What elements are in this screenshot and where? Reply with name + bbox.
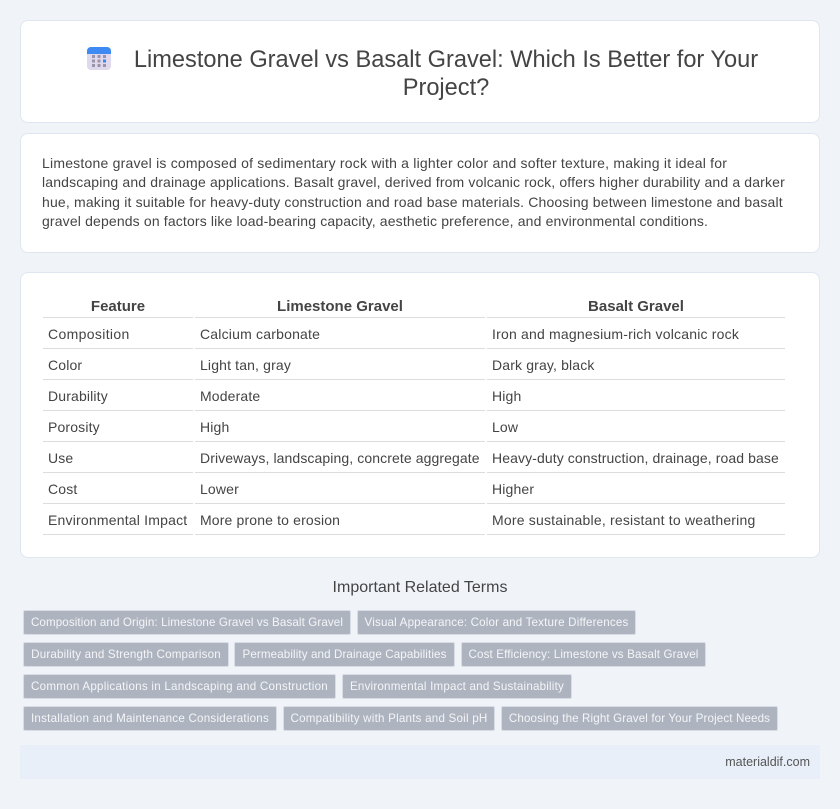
row: porosity xyxy=(48,419,518,435)
text: introduction paragraph: Limestone gravel is composed of sedimentary rock with a lighter color and softer texture, making it ideal for xyxy=(42,154,727,170)
row: use: Driveways, landscaping, concrete aggregate xyxy=(200,450,480,466)
table header: Limestone Gravel xyxy=(277,298,403,315)
tag: Durability and Strength Comparison xyxy=(31,648,221,661)
panel: comparison table xyxy=(20,272,820,558)
footer text: materialdif.com xyxy=(725,755,810,769)
tag xyxy=(357,610,636,635)
row: composition: Iron and magnesium-rich volcanic rock xyxy=(492,326,739,342)
text: introduction paragraph: gravel depends on factors like load-bearing capacity, aesthetic preference, and environmental conditions. xyxy=(42,213,708,229)
footer xyxy=(20,745,820,779)
row: durability: High xyxy=(492,388,521,404)
title: Limestone Gravel vs Basalt Gravel: Which Is Better for Your Project? xyxy=(134,47,758,101)
row: cost: Cost xyxy=(48,481,77,497)
row: environmental impact xyxy=(48,512,755,528)
panel: introduction xyxy=(20,133,820,253)
tag xyxy=(23,706,277,731)
tag: Permeability and Drainage Capabilities xyxy=(243,648,446,661)
panel: header xyxy=(20,20,820,123)
row: color: Light tan, gray xyxy=(200,357,291,373)
row: environmental impact: Environmental Impact xyxy=(48,512,187,528)
tag: Environmental Impact and Sustainability xyxy=(350,680,564,693)
row: color: Color xyxy=(48,357,82,373)
table header: Feature xyxy=(91,298,145,315)
row: color: Dark gray, black xyxy=(492,357,595,373)
row: environmental impact: More prone to erosion xyxy=(200,512,340,528)
tag: Common Applications in Landscaping and Construction xyxy=(31,680,328,693)
row: durability: Durability xyxy=(48,388,108,404)
tag: Installation and Maintenance Considerations xyxy=(31,712,269,725)
row: cost: Lower xyxy=(200,481,239,497)
tag xyxy=(23,642,229,667)
table: comparison xyxy=(43,298,785,535)
row: cost: Higher xyxy=(492,481,534,497)
row: porosity: High xyxy=(200,419,229,435)
text: introduction paragraph: landscaping and drainage applications. Basalt gravel, derived from volcanic rock, offers higher durability and a darker xyxy=(42,174,785,190)
row: composition: Calcium carbonate xyxy=(200,326,320,342)
tag: Compatibility with Plants and Soil pH xyxy=(291,712,487,725)
row: use xyxy=(48,450,779,466)
row: cost xyxy=(48,481,534,497)
row: use: Heavy-duty construction, drainage, road base xyxy=(492,450,779,466)
tag xyxy=(234,642,455,667)
tag: Choosing the Right Gravel for Your Project Needs xyxy=(509,712,770,725)
heading: related terms: Important Related Terms xyxy=(333,579,507,596)
row: durability: Moderate xyxy=(200,388,260,404)
row: composition xyxy=(48,326,739,342)
tag xyxy=(461,642,706,667)
row: composition: Composition xyxy=(48,326,130,342)
tag xyxy=(283,706,495,731)
row: use: Use xyxy=(48,450,73,466)
icon: calendar xyxy=(87,47,111,70)
tag xyxy=(23,674,336,699)
row: porosity: Porosity xyxy=(48,419,100,435)
tag xyxy=(23,610,351,635)
row: environmental impact: More sustainable, resistant to weathering xyxy=(492,512,755,528)
tag: Composition and Origin: Limestone Gravel vs Basalt Gravel xyxy=(31,616,343,629)
tag: Visual Appearance: Color and Texture Differences xyxy=(365,616,628,629)
tag xyxy=(501,706,778,731)
row: color xyxy=(48,357,595,373)
row: porosity: Low xyxy=(492,419,518,435)
tag: Cost Efficiency: Limestone vs Basalt Gravel xyxy=(468,648,699,661)
tag list: related terms xyxy=(23,610,778,731)
row: durability xyxy=(48,388,521,404)
tag xyxy=(342,674,572,699)
text: introduction paragraph: hue, making it suitable for heavy-duty construction and road base materials. Choosing between limestone and basalt xyxy=(42,194,783,210)
table header xyxy=(91,298,684,315)
table header: Basalt Gravel xyxy=(588,298,684,315)
text: introduction paragraph xyxy=(42,154,785,229)
